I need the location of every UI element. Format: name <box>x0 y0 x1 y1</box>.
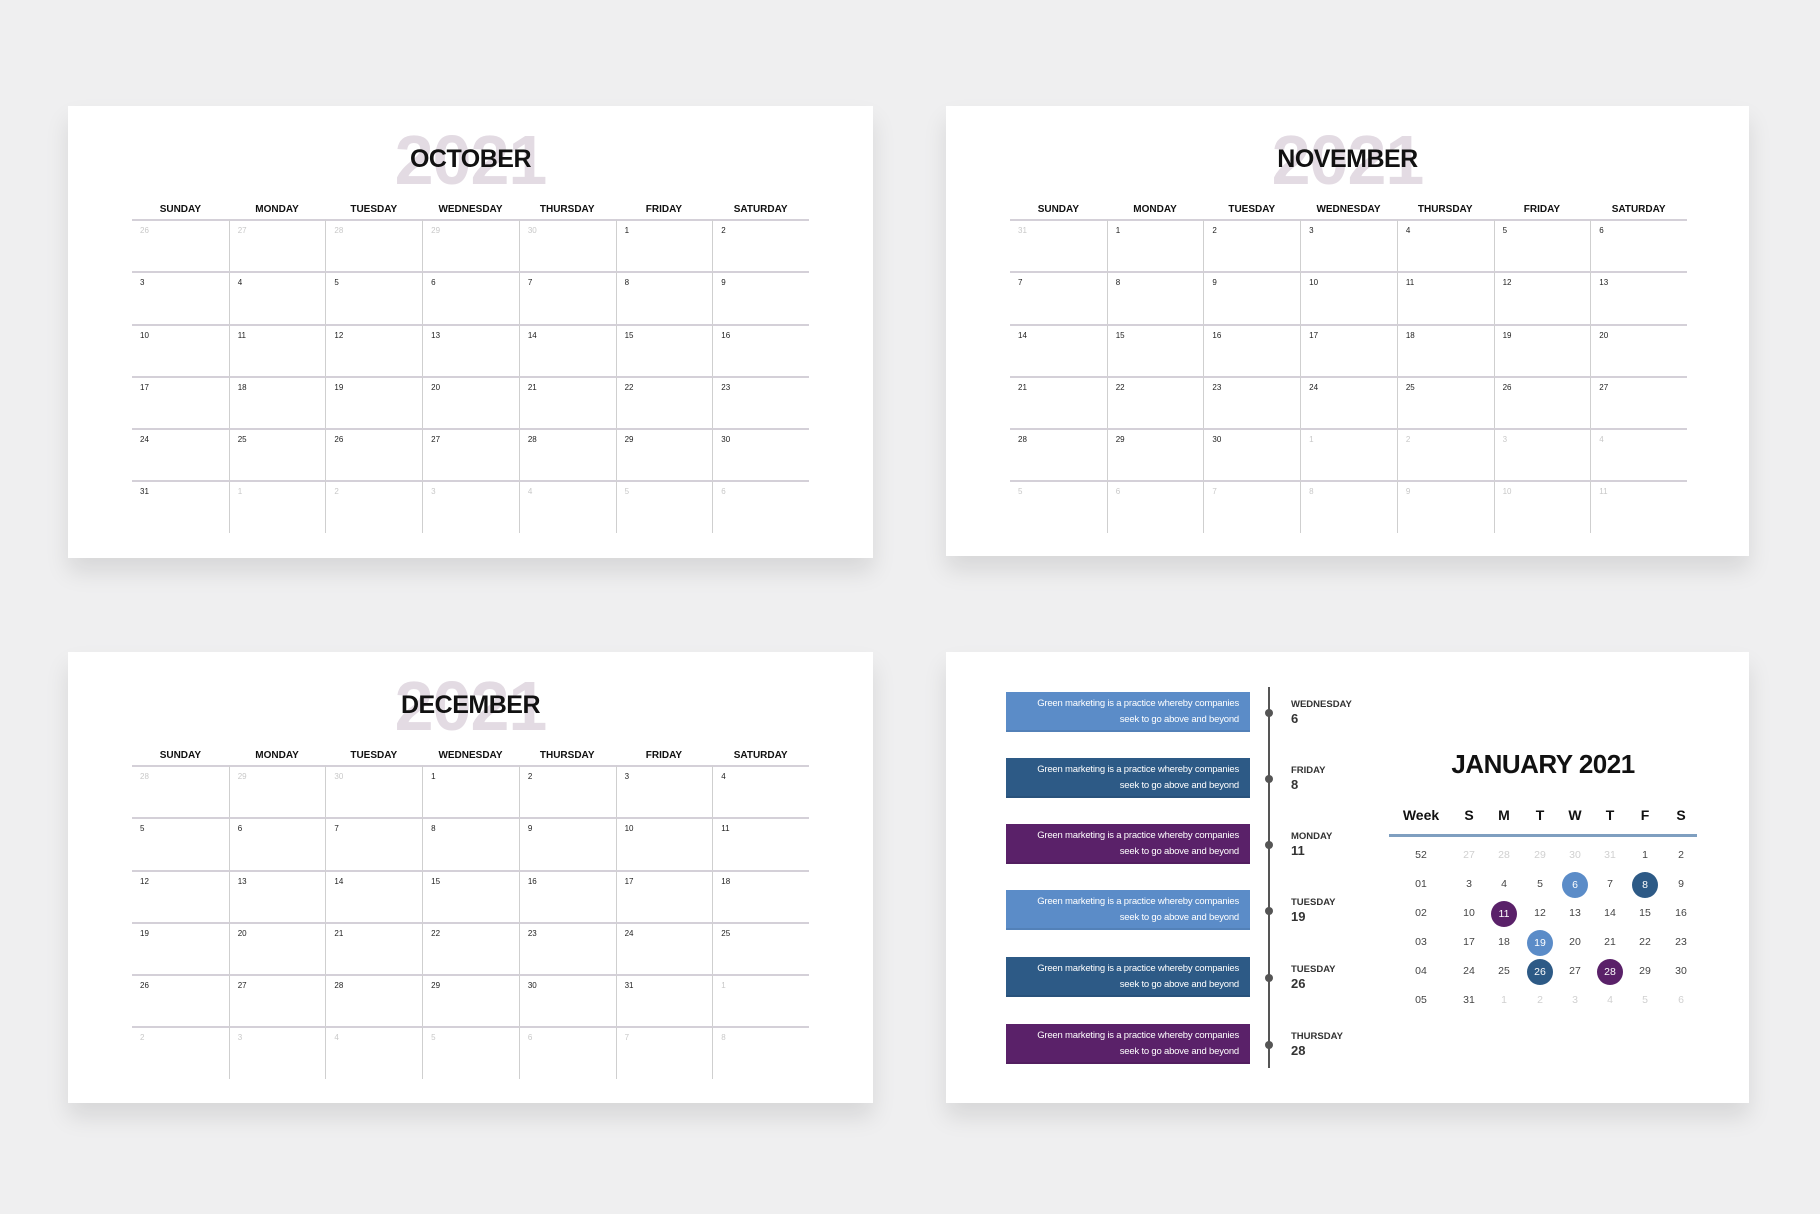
calendar grid: 15 <box>1116 331 1125 340</box>
label tuesday 26 <box>1291 964 1336 991</box>
title: october: OCTOBER <box>410 145 531 173</box>
weekday header: MONDAY <box>255 750 299 761</box>
calendar grid: 21 <box>528 383 537 392</box>
calendar grid: 10 <box>1309 278 1318 287</box>
calendar grid: 31 <box>1018 226 1027 235</box>
calendar grid: 26 <box>140 981 149 990</box>
mini calendar: 03 <box>1415 936 1427 948</box>
calendar grid: 2 <box>528 772 532 781</box>
mini calendar: 31 <box>1463 994 1475 1006</box>
calendar grid: 10 <box>1503 487 1511 496</box>
calendar grid: 6 <box>1116 487 1120 496</box>
mini calendar: 30 <box>1675 965 1687 977</box>
calendar grid: 29 <box>431 981 440 990</box>
weekday header: THURSDAY <box>540 204 595 215</box>
panel: december <box>68 652 873 1103</box>
calendar grid: 5 <box>625 487 629 496</box>
calendar grid: 17 <box>1309 331 1318 340</box>
calendar grid: 11 <box>721 824 730 833</box>
mini calendar: 3 <box>1466 878 1472 890</box>
calendar grid: 6 <box>1599 226 1604 235</box>
calendar grid: 8 <box>625 278 629 287</box>
calendar grid: 15 <box>431 877 440 886</box>
calendar grid: 10 <box>625 824 633 833</box>
calendar grid: 9 <box>1406 487 1410 496</box>
calendar grid: 23 <box>1212 383 1221 392</box>
mini calendar: 4 <box>1607 994 1613 1006</box>
mini calendar: Week <box>1403 807 1439 823</box>
calendar grid: 24 <box>625 929 633 938</box>
calendar grid: 22 <box>431 929 440 938</box>
calendar grid: 13 <box>1599 278 1608 287</box>
calendar grid: 26 <box>334 435 343 444</box>
mini calendar: 2 <box>1678 849 1684 861</box>
mini calendar: 22 <box>1639 936 1651 948</box>
event box 3: Green marketing is a practice whereby companies <box>1037 830 1239 841</box>
event box 2: seek to go above and beyond <box>1120 780 1239 790</box>
calendar grid: 29 <box>431 226 440 235</box>
calendar grid <box>132 765 809 1079</box>
calendar grid: 3 <box>625 772 629 781</box>
calendar grid: 30 <box>721 435 730 444</box>
mini calendar: 29 <box>1534 849 1546 861</box>
calendar grid: 5 <box>334 278 339 287</box>
mini calendar: 04 <box>1415 965 1427 977</box>
calendar grid: 8 <box>1309 487 1314 496</box>
calendar grid: 9 <box>721 278 726 287</box>
title: december: DECEMBER <box>401 691 540 719</box>
timeline dots <box>1265 709 1273 1049</box>
mini calendar: T <box>1536 807 1544 823</box>
calendar grid: 30 <box>334 772 343 781</box>
mini calendar: 15 <box>1639 907 1651 919</box>
mini calendar: 23 <box>1675 936 1687 948</box>
calendar grid: 28 <box>334 981 343 990</box>
mini calendar: 02 <box>1415 907 1427 919</box>
weekday header: THURSDAY <box>1418 204 1473 215</box>
calendar grid: 7 <box>1212 487 1217 496</box>
weekday header: MONDAY <box>1133 204 1177 215</box>
calendar grid: 23 <box>528 929 537 938</box>
calendar grid: 16 <box>721 331 730 340</box>
event box 4: Green marketing is a practice whereby companies <box>1037 896 1239 907</box>
calendar grid: 29 <box>625 435 633 444</box>
weekday header: TUESDAY <box>350 204 397 215</box>
calendar grid: 27 <box>238 226 247 235</box>
calendar grid: 7 <box>625 1033 629 1042</box>
mini calendar: 05 <box>1415 994 1427 1006</box>
calendar grid: 28 <box>140 772 149 781</box>
event box 6: seek to go above and beyond <box>1120 1046 1239 1056</box>
calendar grid: 1 <box>1116 226 1120 235</box>
mini calendar: 12 <box>1534 907 1546 919</box>
weekday header: THURSDAY <box>540 750 595 761</box>
calendar grid: 1 <box>431 772 436 781</box>
calendar grid: 3 <box>1309 226 1314 235</box>
calendar grid: 16 <box>528 877 537 886</box>
weekday header: TUESDAY <box>350 750 397 761</box>
calendar grid: 20 <box>1599 331 1608 340</box>
weekday header: FRIDAY <box>1524 204 1560 215</box>
calendar grid: 13 <box>431 331 440 340</box>
calendar grid: 6 <box>528 1033 532 1042</box>
calendar grid: 25 <box>721 929 730 938</box>
year watermark: 2021 <box>395 121 546 199</box>
label friday 8 <box>1291 765 1326 792</box>
year watermark: 2021 <box>1272 121 1423 199</box>
panel: october <box>68 106 873 558</box>
mini calendar: 30 <box>1569 849 1581 861</box>
calendar grid: 5 <box>140 824 144 833</box>
calendar grid: 18 <box>721 877 730 886</box>
calendar grid: 9 <box>1212 278 1217 287</box>
weekday header: MONDAY <box>255 204 299 215</box>
calendar grid <box>1010 219 1687 533</box>
mini calendar: 17 <box>1463 936 1475 948</box>
label tuesday 26: TUESDAY <box>1291 964 1336 975</box>
mini calendar: 25 <box>1498 965 1510 977</box>
weekday header: SUNDAY <box>1038 204 1079 215</box>
calendar grid: 3 <box>431 487 436 496</box>
mini calendar: 3 <box>1572 994 1578 1006</box>
calendar grid: 31 <box>625 981 633 990</box>
calendar grid: 12 <box>1503 278 1511 287</box>
calendar grid: 5 <box>1503 226 1507 235</box>
calendar grid: 14 <box>334 877 343 886</box>
mini calendar: 13 <box>1569 907 1581 919</box>
mini calendar: S <box>1464 807 1474 823</box>
calendar grid: 31 <box>140 487 149 496</box>
mini calendar: 31 <box>1604 849 1616 861</box>
label friday 8: FRIDAY <box>1291 765 1326 776</box>
calendar grid: 4 <box>721 772 726 781</box>
calendar grid: 17 <box>625 877 633 886</box>
mini calendar: 19 <box>1534 937 1546 949</box>
event box 4 <box>1006 890 1250 930</box>
calendar grid: 9 <box>528 824 532 833</box>
mini calendar: 11 <box>1499 908 1509 920</box>
calendar grid: 19 <box>140 929 149 938</box>
mini calendar: 01 <box>1415 878 1427 890</box>
label tuesday 19 <box>1291 897 1336 924</box>
weekday header: WEDNESDAY <box>438 204 503 215</box>
label thursday 28: 28 <box>1291 1043 1305 1058</box>
calendar grid: 8 <box>1116 278 1120 287</box>
label thursday 28 <box>1291 1031 1343 1058</box>
mini calendar: 29 <box>1639 965 1651 977</box>
calendar grid: 14 <box>1018 331 1027 340</box>
mini calendar: 24 <box>1463 965 1475 977</box>
mini calendar: 8 <box>1642 879 1648 891</box>
calendar grid: 7 <box>334 824 339 833</box>
calendar grid: 11 <box>238 331 246 340</box>
calendar grid: 4 <box>528 487 532 496</box>
calendar grid: 1 <box>1309 435 1314 444</box>
label monday 11: 11 <box>1291 843 1305 858</box>
row 52: 52 <box>1415 849 1427 861</box>
calendar grid: 26 <box>1503 383 1511 392</box>
mini calendar: 5 <box>1642 994 1648 1006</box>
calendar grid: 2 <box>721 226 726 235</box>
calendar grid: 3 <box>140 278 144 287</box>
weekday header: SATURDAY <box>734 750 788 761</box>
event box 5 <box>1006 957 1250 997</box>
calendar grid: 21 <box>334 929 343 938</box>
panel: november <box>946 106 1749 556</box>
label wednesday 6: WEDNESDAY <box>1291 699 1352 710</box>
calendar grid: 21 <box>1018 383 1027 392</box>
mini calendar: 5 <box>1537 878 1543 890</box>
weekday header: FRIDAY <box>646 204 682 215</box>
calendar grid: 29 <box>238 772 247 781</box>
calendar grid: 27 <box>1599 383 1608 392</box>
calendar grid: 18 <box>238 383 247 392</box>
event box 5: seek to go above and beyond <box>1120 978 1239 990</box>
calendar grid: 28 <box>334 226 343 235</box>
weekday header: WEDNESDAY <box>438 750 503 761</box>
calendar grid: 2 <box>140 1033 144 1042</box>
calendar grid: 8 <box>431 824 436 833</box>
calendar grid: 23 <box>721 383 730 392</box>
calendar grid: 4 <box>1406 226 1410 235</box>
calendar grid: 15 <box>625 331 633 340</box>
calendar grid: 16 <box>1212 331 1221 340</box>
calendar grid: 27 <box>431 435 440 444</box>
calendar grid: 13 <box>238 877 247 886</box>
calendar grid: 7 <box>528 278 532 287</box>
year watermark: 2021 <box>395 667 546 745</box>
calendar grid: 22 <box>625 383 633 392</box>
calendar grid: 30 <box>528 226 537 235</box>
calendar grid: 4 <box>334 1033 339 1042</box>
mini calendar: 16 <box>1675 907 1687 919</box>
weekday header <box>160 750 788 761</box>
mini calendar: 27 <box>1463 849 1475 861</box>
calendar grid: 27 <box>238 981 247 990</box>
calendar grid: 20 <box>431 383 440 392</box>
event box 2 <box>1006 758 1250 798</box>
calendar grid: 25 <box>238 435 247 444</box>
calendar grid: 29 <box>1116 435 1125 444</box>
calendar grid: 3 <box>238 1033 242 1042</box>
calendar grid: 20 <box>238 929 247 938</box>
event box 5: Green marketing is a practice whereby companies <box>1037 963 1239 974</box>
calendar grid: 30 <box>528 981 537 990</box>
title: november: NOVEMBER <box>1277 145 1418 173</box>
label tuesday 19: TUESDAY <box>1291 897 1336 908</box>
label tuesday 19: 19 <box>1291 909 1305 924</box>
event box 1: seek to go above and beyond <box>1120 714 1239 724</box>
panel: january events <box>946 652 1749 1103</box>
calendar grid: 11 <box>1599 487 1608 496</box>
calendar grid: 24 <box>1309 383 1318 392</box>
calendar grid: 22 <box>1116 383 1125 392</box>
label friday 8: 8 <box>1291 777 1298 792</box>
timeline line <box>1268 687 1270 1068</box>
mini calendar: 18 <box>1498 936 1510 948</box>
weekday header: SUNDAY <box>160 204 201 215</box>
event box 2: Green marketing is a practice whereby companies <box>1037 764 1239 775</box>
calendar grid: 14 <box>528 331 537 340</box>
mini calendar: W <box>1568 807 1582 823</box>
calendar grid: 12 <box>334 331 343 340</box>
weekday header: SATURDAY <box>734 204 788 215</box>
mini calendar: 20 <box>1569 936 1581 948</box>
weekday header <box>1038 204 1666 215</box>
weekday header: SUNDAY <box>160 750 201 761</box>
label tuesday 26: 26 <box>1291 976 1305 991</box>
mini calendar: 27 <box>1569 965 1581 977</box>
calendar grid: 2 <box>1406 435 1410 444</box>
calendar grid: 5 <box>431 1033 436 1042</box>
calendar grid: 2 <box>1212 226 1217 235</box>
event box 4: seek to go above and beyond <box>1120 912 1239 922</box>
event box 3 <box>1006 824 1250 864</box>
mini calendar: 1 <box>1501 994 1507 1006</box>
event box 1 <box>1006 692 1250 732</box>
mini calendar: 21 <box>1604 936 1616 948</box>
calendar grid: 19 <box>334 383 343 392</box>
mini calendar: 7 <box>1607 878 1613 890</box>
mini calendar: 2 <box>1537 994 1543 1006</box>
mini calendar: 26 <box>1534 966 1546 978</box>
calendar grid: 6 <box>721 487 726 496</box>
mini calendar: T <box>1606 807 1614 823</box>
mini calendar <box>1389 807 1697 1006</box>
calendar grid: 4 <box>238 278 242 287</box>
label monday 11 <box>1291 831 1332 858</box>
calendar grid: 1 <box>238 487 242 496</box>
event box 3: seek to go above and beyond <box>1120 846 1239 856</box>
calendar grid: 26 <box>140 226 149 235</box>
mini calendar: 9 <box>1678 878 1684 890</box>
calendar grid: 30 <box>1212 435 1221 444</box>
calendar grid: 24 <box>140 435 149 444</box>
weekday header: SATURDAY <box>1612 204 1666 215</box>
calendar grid: 10 <box>140 331 149 340</box>
calendar grid: 18 <box>1406 331 1415 340</box>
mini calendar: 28 <box>1604 966 1616 978</box>
mini calendar: 6 <box>1572 879 1578 891</box>
weekday header: TUESDAY <box>1228 204 1275 215</box>
calendar grid <box>132 219 809 533</box>
calendar grid: 1 <box>625 226 629 235</box>
mini calendar: 6 <box>1678 994 1684 1006</box>
calendar grid: 11 <box>1406 278 1414 287</box>
calendar grid: 4 <box>1599 435 1604 444</box>
label wednesday 6 <box>1291 699 1352 726</box>
calendar grid: 2 <box>334 487 339 496</box>
mini calendar: 4 <box>1501 878 1507 890</box>
weekday header: WEDNESDAY <box>1316 204 1381 215</box>
calendar grid: 3 <box>1503 435 1507 444</box>
mini calendar: 28 <box>1498 849 1510 861</box>
event box 6 <box>1006 1024 1250 1064</box>
mini calendar: M <box>1498 807 1510 823</box>
mini calendar: F <box>1641 807 1649 823</box>
label monday 11: MONDAY <box>1291 831 1332 842</box>
calendar grid: 1 <box>721 981 726 990</box>
mini calendar: 1 <box>1642 849 1648 861</box>
calendar grid: 7 <box>1018 278 1022 287</box>
calendar grid: 12 <box>140 877 149 886</box>
calendar grid: 28 <box>1018 435 1027 444</box>
calendar grid: 19 <box>1503 331 1511 340</box>
calendar grid: 8 <box>721 1033 726 1042</box>
calendar grid: 25 <box>1406 383 1415 392</box>
calendar grid: 17 <box>140 383 149 392</box>
weekday header: FRIDAY <box>646 750 682 761</box>
calendar grid: 28 <box>528 435 537 444</box>
calendar grid: 5 <box>1018 487 1022 496</box>
calendar grid: 6 <box>238 824 242 833</box>
mini calendar: 10 <box>1463 907 1475 919</box>
calendar grid: 6 <box>431 278 436 287</box>
label thursday 28: THURSDAY <box>1291 1031 1343 1042</box>
title: january 2021: JANUARY 2021 <box>1451 749 1635 779</box>
mini calendar: 14 <box>1604 907 1616 919</box>
label wednesday 6: 6 <box>1291 711 1298 726</box>
weekday header <box>160 204 788 215</box>
event box 1: Green marketing is a practice whereby companies <box>1037 698 1239 709</box>
mini calendar: S <box>1676 807 1686 823</box>
event box 6: Green marketing is a practice whereby companies <box>1037 1030 1239 1041</box>
